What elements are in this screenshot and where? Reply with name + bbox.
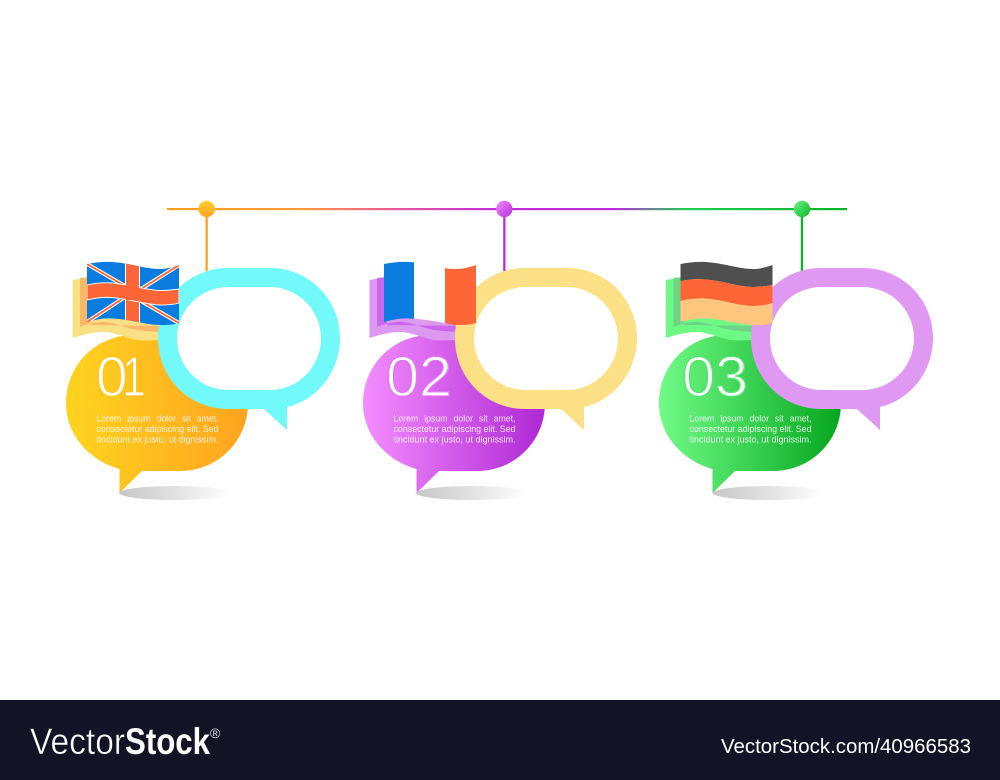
- number 03: 03: [682, 345, 748, 409]
- panel: step 03: [659, 201, 933, 500]
- outline speech bubble 03: [751, 268, 933, 430]
- outline speech bubble 01: [158, 268, 340, 430]
- number 01: 0: [96, 345, 128, 409]
- node 02: [496, 201, 512, 217]
- VectorStock logo: Stock: [125, 721, 210, 762]
- ground shadow 03: [712, 486, 826, 500]
- node 01: [198, 201, 215, 217]
- speech bubble 02: [363, 335, 545, 493]
- VectorStock logo: ®: [210, 725, 221, 741]
- ground shadow 02: [416, 486, 529, 500]
- VectorStock logo: Vector: [30, 721, 125, 762]
- speech bubble 01: [66, 335, 248, 493]
- number 02: 02: [386, 345, 452, 409]
- connector timeline: [167, 208, 847, 210]
- icon: France flag: [384, 262, 476, 325]
- VectorStock logo: [30, 721, 221, 762]
- ground shadow 01: [119, 486, 232, 500]
- node 03: [794, 201, 810, 217]
- panel: step 02: [363, 201, 637, 500]
- flag shadow layers 01: [72, 277, 170, 340]
- hanging connector 02: [503, 209, 506, 271]
- panel: step 01: [66, 201, 340, 500]
- description 01: Lorem ipsum dolor sit amet,: [96, 414, 218, 424]
- footer band: [0, 700, 1000, 780]
- description 02: consectetur adipiscing elit. Sed: [394, 424, 516, 434]
- icon: UK flag: [87, 262, 179, 325]
- description 03: consectetur adipiscing elit. Sed: [690, 424, 812, 434]
- description 03: Lorem ipsum dolor sit amet,: [690, 414, 812, 424]
- description 02: tincidunt ex justo, ut dignissim.: [394, 434, 516, 444]
- description 02: Lorem ipsum dolor sit amet,: [394, 414, 516, 424]
- image id: VectorStock.com/40966583: [721, 736, 971, 758]
- outline speech bubble 02: [455, 268, 637, 430]
- icon: Germany flag: [680, 262, 772, 325]
- speech bubble 03: [659, 335, 841, 493]
- hanging connector 03: [801, 209, 803, 271]
- description 01: consectetur adipiscing elit. Sed: [96, 424, 218, 434]
- description 03: tincidunt ex justo, ut dignissim.: [690, 434, 812, 444]
- flag shadow layers 03: [666, 277, 764, 340]
- number 01: [96, 344, 146, 409]
- number 01: 1: [122, 344, 146, 408]
- hanging connector 01: [206, 209, 208, 271]
- flag shadow layers 02: [370, 270, 467, 340]
- description 01: tincidunt ex justo, ut dignissim.: [96, 434, 218, 444]
